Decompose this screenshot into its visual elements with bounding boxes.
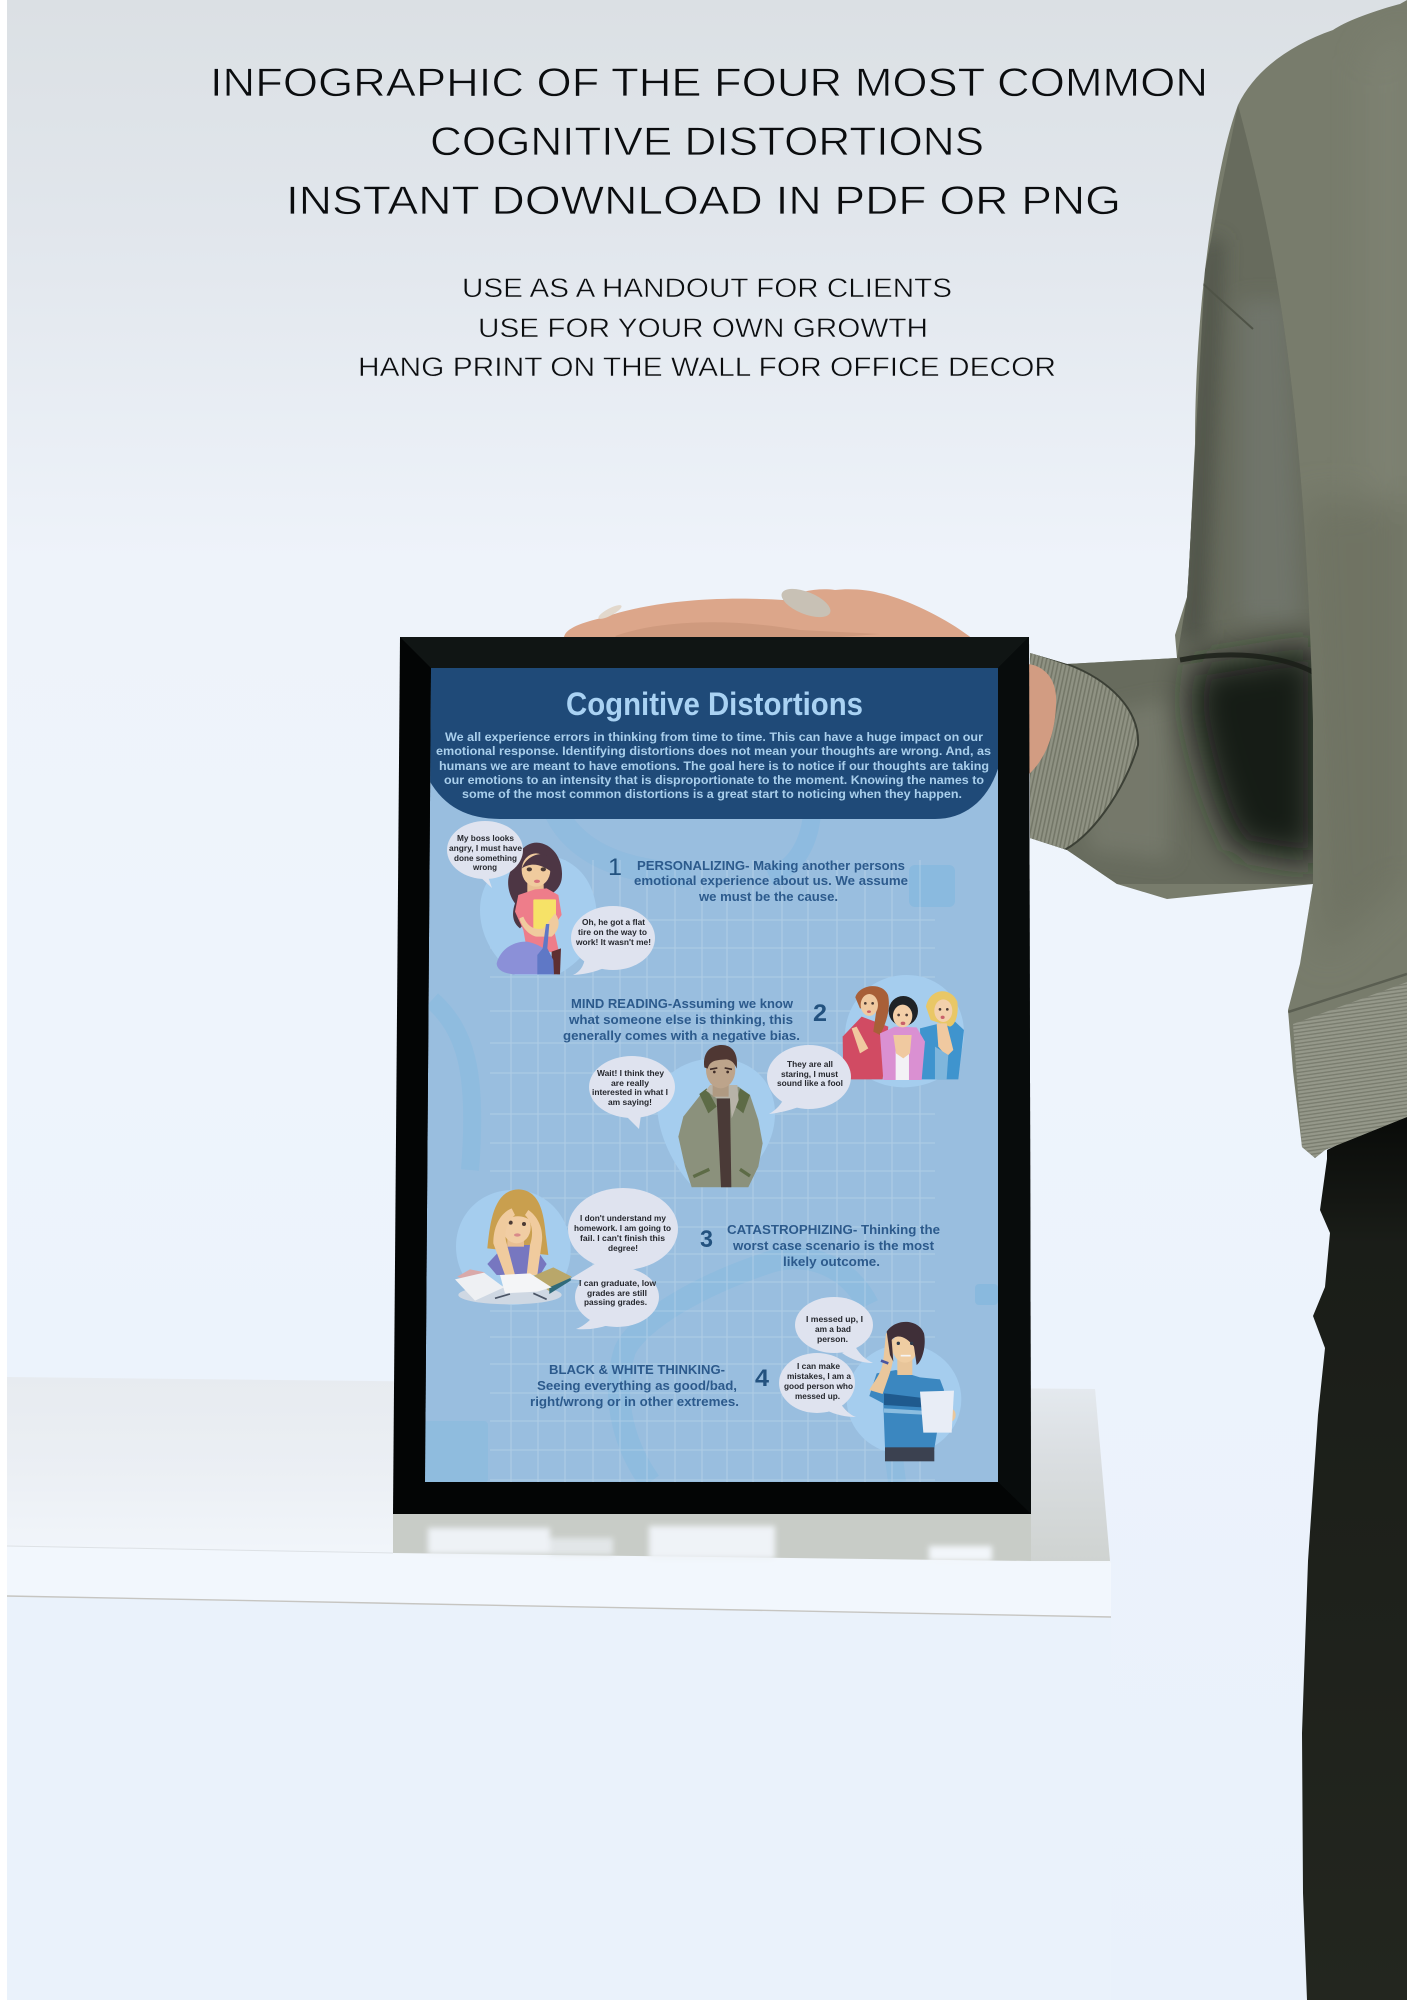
header banner: [425, 668, 1000, 819]
number 2: 2: [813, 1000, 827, 1027]
panel: poster: [424, 668, 1000, 1483]
headline: INFOGRAPHIC OF THE FOUR MOST COMMON: [210, 61, 1208, 105]
speech bubble: tire on the way to: [578, 927, 647, 937]
person: sweater cuff: [1025, 650, 1138, 852]
speech bubble: staring, I must: [781, 1069, 838, 1079]
item 3 description: [727, 1222, 940, 1269]
item 4 description: BLACK & WHITE THINKING-: [549, 1362, 725, 1377]
item 2 description: [563, 996, 800, 1043]
number 4: 4: [755, 1365, 770, 1392]
intro paragraph: We all experience errors in thinking from time to time. This can have a huge impact on our: [445, 732, 984, 744]
speech bubble: am saying!: [608, 1097, 652, 1107]
speech bubble: good person who: [784, 1381, 853, 1391]
intro paragraph: humans we are meant to have emotions. The goal here is to notice if our thoughts are taking: [439, 761, 989, 773]
speech bubble: am a bad: [815, 1324, 851, 1334]
speech bubble: [767, 1045, 851, 1114]
speech bubble: angry, I must have: [449, 843, 522, 853]
speech bubble: work! It wasn't me!: [575, 937, 651, 947]
speech bubble: interested in what I: [592, 1087, 668, 1097]
speech bubble: homework. I am going to: [574, 1223, 671, 1233]
headline: [210, 61, 1208, 223]
speech bubble: messed up.: [795, 1391, 840, 1401]
intro paragraph: emotional response. Identifying distortions does not mean your thoughts are wrong. And, as: [436, 746, 991, 758]
speech bubble: wrong: [472, 862, 497, 872]
item 1 description: emotional experience about us. We assume: [634, 873, 908, 888]
poster background brush strokes: [432, 812, 897, 1482]
item 4 description: right/wrong or in other extremes.: [530, 1394, 739, 1409]
item 1 description: [634, 860, 908, 901]
character group: three shocked women: [843, 975, 964, 1087]
person: sweater: [1020, 0, 1410, 1170]
speech bubble: passing grades.: [584, 1297, 647, 1307]
headline: COGNITIVE DISTORTIONS: [430, 120, 984, 164]
intro paragraph: our emotions to an intensity that is disproportionate to the moment. Knowing the names to: [444, 775, 984, 787]
character: stressed student at desk: [455, 1189, 572, 1305]
headline: INSTANT DOWNLOAD IN PDF OR PNG: [286, 179, 1121, 223]
speech bubble: [568, 1188, 678, 1329]
speech bubble: I messed up, I: [806, 1314, 863, 1324]
speech bubble: I can graduate, low: [579, 1278, 656, 1288]
poster grid lines: [490, 860, 935, 1482]
person: trousers: [1302, 1110, 1407, 2000]
item 2 description: what someone else is thinking, this: [568, 1012, 793, 1027]
character: anxious woman with bag: [480, 843, 597, 975]
item 4 description: [530, 1362, 739, 1409]
sub-heading list of uses: HANG PRINT ON THE WALL FOR OFFICE DECOR: [358, 352, 1056, 382]
poster title: Cognitive Distortions: [566, 686, 863, 722]
intro paragraph: some of the most common distortions is a great start to noticing when they happen.: [462, 789, 962, 801]
sub-heading list of uses: USE AS A HANDOUT FOR CLIENTS: [462, 273, 952, 303]
number 1: 1: [608, 854, 622, 881]
speech bubble: [447, 821, 523, 888]
item 3 description: likely outcome.: [783, 1254, 880, 1269]
number 3: 3: [700, 1226, 713, 1253]
item 2 description: generally comes with a negative bias.: [563, 1028, 800, 1043]
item 4 description: Seeing everything as good/bad,: [537, 1378, 737, 1393]
speech bubble: mistakes, I am a: [787, 1371, 851, 1381]
speech bubble: [779, 1297, 873, 1417]
person: hand and wrist: [564, 583, 1056, 775]
speech bubble: are really: [611, 1078, 649, 1088]
speech bubble: They are all: [787, 1059, 833, 1069]
speech bubble: degree!: [608, 1243, 638, 1253]
speech bubble: person.: [817, 1334, 848, 1344]
speech bubble: sound like a fool: [777, 1078, 843, 1088]
sub-heading list of uses: USE FOR YOUR OWN GROWTH: [478, 313, 928, 343]
speech bubble: [571, 906, 655, 975]
character: worried man in green jacket: [657, 1045, 775, 1187]
sub-heading list of uses: [358, 273, 1056, 382]
white table: [7, 1377, 1111, 2000]
speech bubble: My boss looks: [457, 833, 514, 843]
item 2 description: MIND READING-Assuming we know: [571, 996, 794, 1011]
speech bubble: fail. I can't finish this: [580, 1233, 665, 1243]
speech bubble: Wait! I think they: [597, 1068, 664, 1078]
speech bubble: done something: [454, 853, 517, 863]
icon: fingernail: [778, 583, 834, 623]
item 1 description: PERSONALIZING- Making another persons: [637, 858, 905, 873]
item 3 description: CATASTROPHIZING- Thinking the: [727, 1222, 940, 1237]
frame reflection on table: [393, 1514, 1031, 1561]
speech bubble: grades are still: [587, 1288, 647, 1298]
speech bubble: I don't understand my: [580, 1213, 666, 1223]
speech bubble: Oh, he got a flat: [582, 917, 645, 927]
intro paragraph: [436, 732, 991, 801]
speech bubble: [589, 1056, 675, 1129]
black picture frame: [393, 637, 1031, 1514]
character: regretful young man with paper: [847, 1322, 961, 1461]
item 1 description: we must be the cause.: [698, 889, 838, 904]
speech bubble: I can make: [797, 1361, 840, 1371]
item 3 description: worst case scenario is the most: [732, 1238, 935, 1253]
